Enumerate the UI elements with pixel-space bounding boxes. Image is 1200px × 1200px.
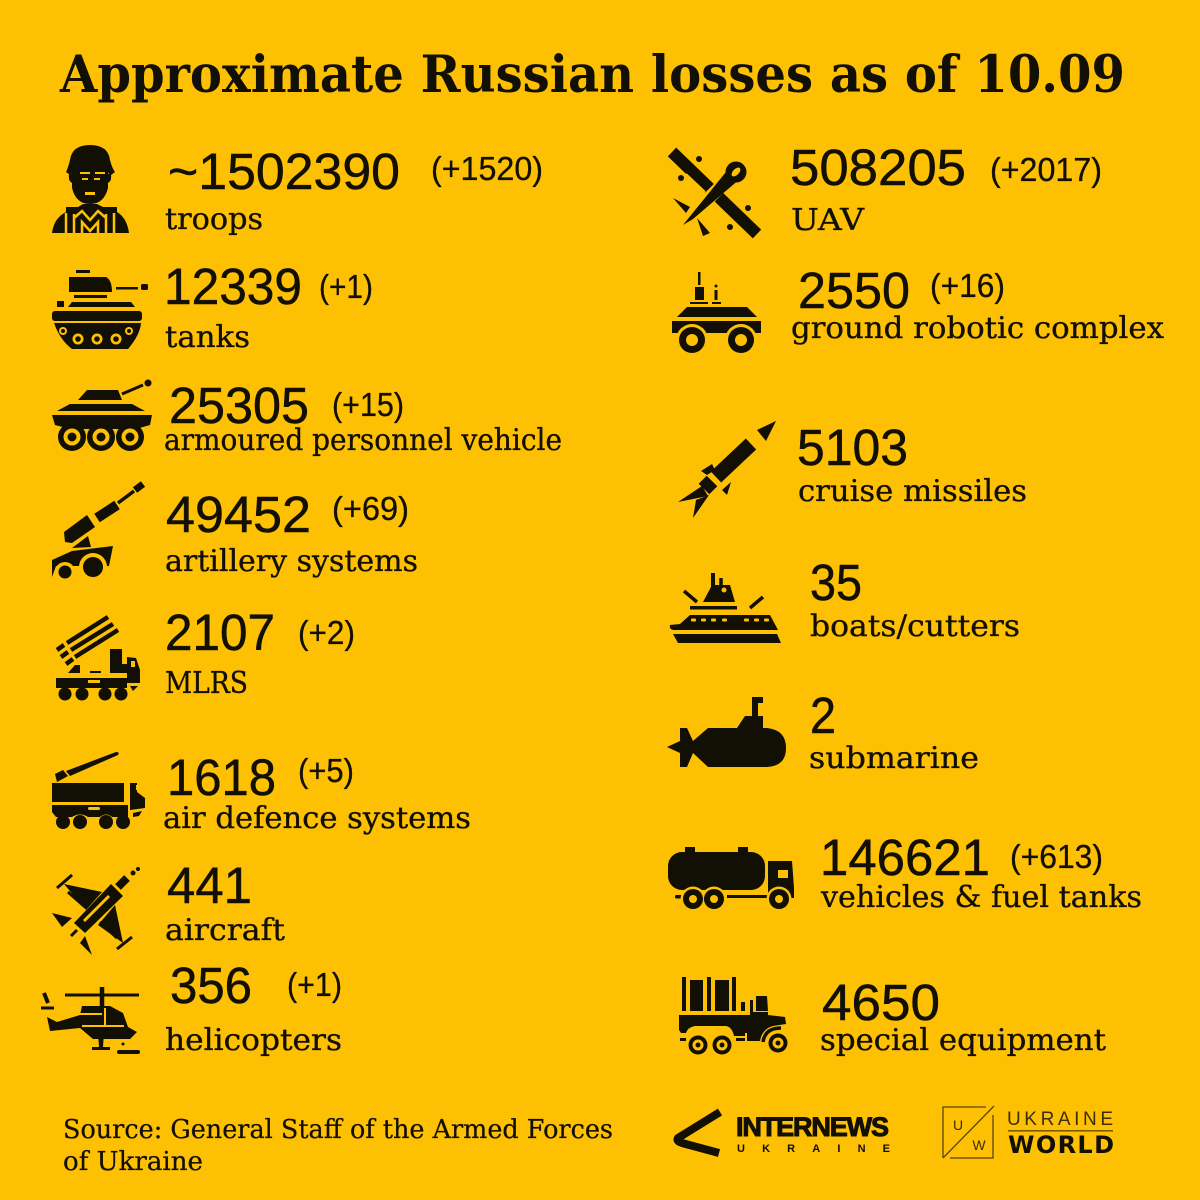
logo: Ukraine World: W [972,1137,986,1153]
MLRS daily change: (+2) [298,614,355,651]
ground robot label: ground robotic complex [791,311,1164,346]
helicopters daily change: (+1) [287,966,342,1003]
boats count: 35 [810,554,862,611]
panel: ground robotic complex [672,262,1164,356]
icon: tank [52,270,148,349]
icon: air defence truck [52,752,145,829]
logo: Ukraine World: UKRAINE [1007,1109,1113,1130]
icon: artillery [52,484,143,582]
troops daily change: (+1520) [431,150,543,187]
armoured vehicle label: armoured personnel vehicle [164,423,562,458]
cruise missiles label: cruise missiles [798,474,1027,509]
troops label: troops [165,202,263,237]
armoured vehicle daily change: (+15) [332,386,404,423]
artillery label: artillery systems [165,544,418,579]
armoured vehicle count: 25305 [169,377,309,434]
vehicles label: vehicles & fuel tanks [820,880,1142,915]
ground robot daily change: (+16) [930,267,1005,304]
panel: MLRS [56,604,355,701]
panel: troops [52,143,543,237]
air defence daily change: (+5) [298,752,354,789]
source note: of Ukraine [63,1147,203,1177]
panel: submarine [667,687,979,776]
troops count: ~1502390 [168,143,400,200]
icon: armoured vehicle [52,380,152,451]
ground robot count: 2550 [798,262,910,319]
logo: Internews Ukraine: UKRAINE [737,1143,890,1155]
logo: Internews Ukraine [678,1112,890,1155]
tanks count: 12339 [164,258,302,315]
artillery count: 49452 [166,486,311,543]
MLRS label: MLRS [165,666,248,701]
icon: fuel tanker [668,847,794,912]
cruise missiles count: 5103 [797,419,908,476]
source note: Source: General Staff of the Armed Forces [63,1115,613,1145]
tanks label: tanks [165,320,250,355]
tanks daily change: (+1) [319,268,373,305]
icon: drone [672,152,757,236]
panel: vehicles and fuel tanks [668,829,1142,915]
boats label: boats/cutters [810,609,1020,644]
title: Approximate Russian losses as of 10.09 [59,45,1125,105]
icon: rocket launcher [56,617,140,700]
panel: special equipment [679,974,1106,1058]
special equipment label: special equipment [820,1023,1106,1058]
icon: cargo truck [679,977,788,1054]
icon: fighter jet [52,867,140,955]
panel: tanks [52,258,373,355]
panel: boats and cutters [670,554,1020,644]
panel: armoured personnel vehicle [52,377,562,458]
helicopters label: helicopters [165,1023,342,1058]
logo: Internews Ukraine: INTERNEWS [736,1112,889,1142]
panel: cruise missiles [678,419,1027,518]
helicopters count: 356 [170,957,252,1014]
UAV label: UAV [791,203,865,238]
artillery daily change: (+69) [332,490,409,527]
panel: artillery systems [52,484,418,582]
MLRS count: 2107 [165,604,275,661]
vehicles daily change: (+613) [1010,838,1103,875]
special equipment count: 4650 [822,974,940,1031]
panel: UAV [672,139,1102,238]
panel: air defence systems [52,749,471,836]
UAV count: 508205 [790,139,966,196]
icon: submarine [667,697,786,767]
aircraft label: aircraft [165,913,285,948]
icon: cruise missile [678,421,776,518]
submarine count: 2 [810,687,836,744]
vehicles count: 146621 [820,829,990,886]
icon: soldier [52,145,129,233]
icon: helicopter [41,987,140,1054]
panel: aircraft [52,857,285,955]
source note [63,1115,613,1177]
logo: Ukraine World: U [953,1117,963,1133]
air defence count: 1618 [167,749,276,806]
air defence label: air defence systems [163,801,471,836]
icon: warship [670,573,781,643]
icon: ground robot [672,272,761,356]
logo: Ukraine World [943,1106,1114,1159]
panel: helicopters [41,957,342,1058]
aircraft count: 441 [167,857,252,914]
submarine label: submarine [809,741,979,776]
logo: Ukraine World: WORLD [1008,1131,1114,1159]
UAV daily change: (+2017) [990,151,1102,188]
